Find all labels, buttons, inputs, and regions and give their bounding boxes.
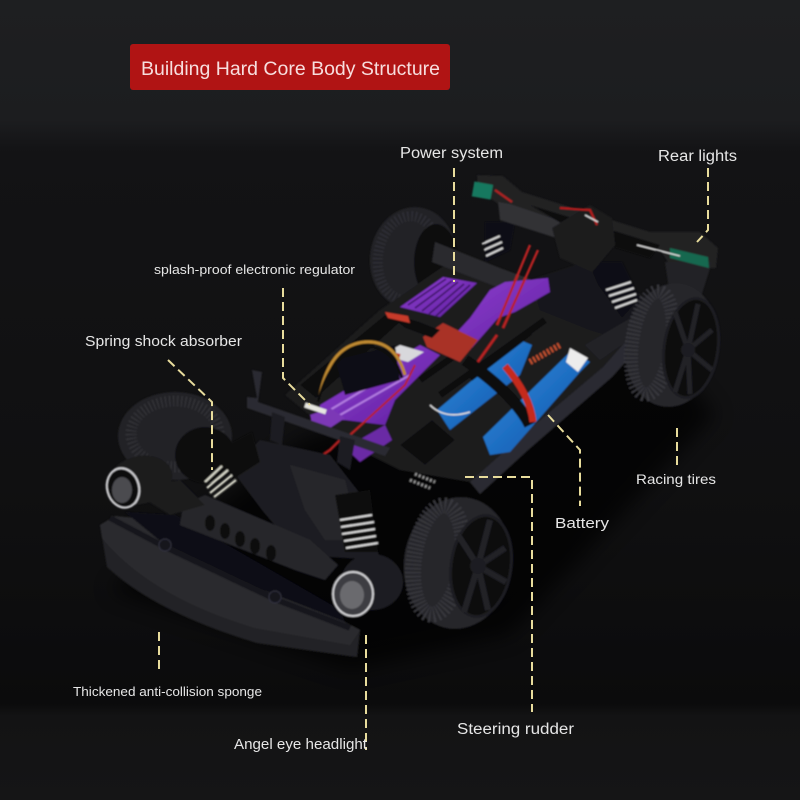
leader: battery [548, 415, 580, 506]
right headlight [333, 554, 403, 616]
front suspension block [232, 440, 380, 560]
label: power system: Power system [400, 145, 503, 162]
label: racing tires: Racing tires [636, 471, 716, 487]
car chassis illustration [100, 175, 727, 670]
rear wires [472, 245, 538, 370]
leader: power system [453, 168, 455, 282]
leader: sponge [158, 632, 160, 672]
battery pack [400, 320, 590, 465]
dashed leader lines [159, 168, 708, 750]
front shock spring right [335, 490, 378, 552]
label: angel eye headlight: Angel eye headlight [234, 737, 367, 753]
front shock tower [247, 370, 390, 470]
leader: regulator [283, 288, 310, 405]
leader: rear lights [697, 168, 708, 242]
label: steering rudder: Steering rudder [457, 721, 574, 738]
left headlight [102, 448, 178, 512]
leader: spring shock [168, 360, 212, 470]
purple centre brace [310, 278, 550, 462]
right rear tire [617, 277, 727, 413]
esc wiring [278, 342, 415, 485]
label: regulator: splash-proof electronic regulator [154, 263, 355, 277]
label: thickened sponge: Thickened anti-collision sponge [73, 685, 262, 699]
red T plug and connectors [378, 312, 478, 362]
heading badge [130, 44, 450, 90]
sponge bumper [100, 512, 360, 657]
purple heat sink [400, 277, 477, 317]
small chassis parts [410, 474, 435, 488]
far rear tire [363, 202, 463, 314]
far front tire [118, 392, 235, 483]
bumper brace [130, 480, 338, 580]
front shock spring left [205, 432, 260, 497]
label: rear lights: Rear lights [658, 148, 737, 165]
heading badge: Building Hard Core Body Structure [141, 59, 440, 80]
rear light bar [472, 175, 718, 310]
rear shock springs [482, 222, 640, 318]
leader: steering rudder [465, 477, 532, 712]
label: battery: Battery [555, 515, 610, 532]
near front tire [395, 490, 521, 636]
rear axle arm [432, 242, 650, 360]
main chassis plate [285, 262, 640, 482]
leader: headlight [365, 635, 367, 750]
label: spring shock absorber: Spring shock absorber [85, 333, 242, 350]
ground shadow [110, 320, 715, 670]
leader: racing tires [676, 428, 678, 466]
